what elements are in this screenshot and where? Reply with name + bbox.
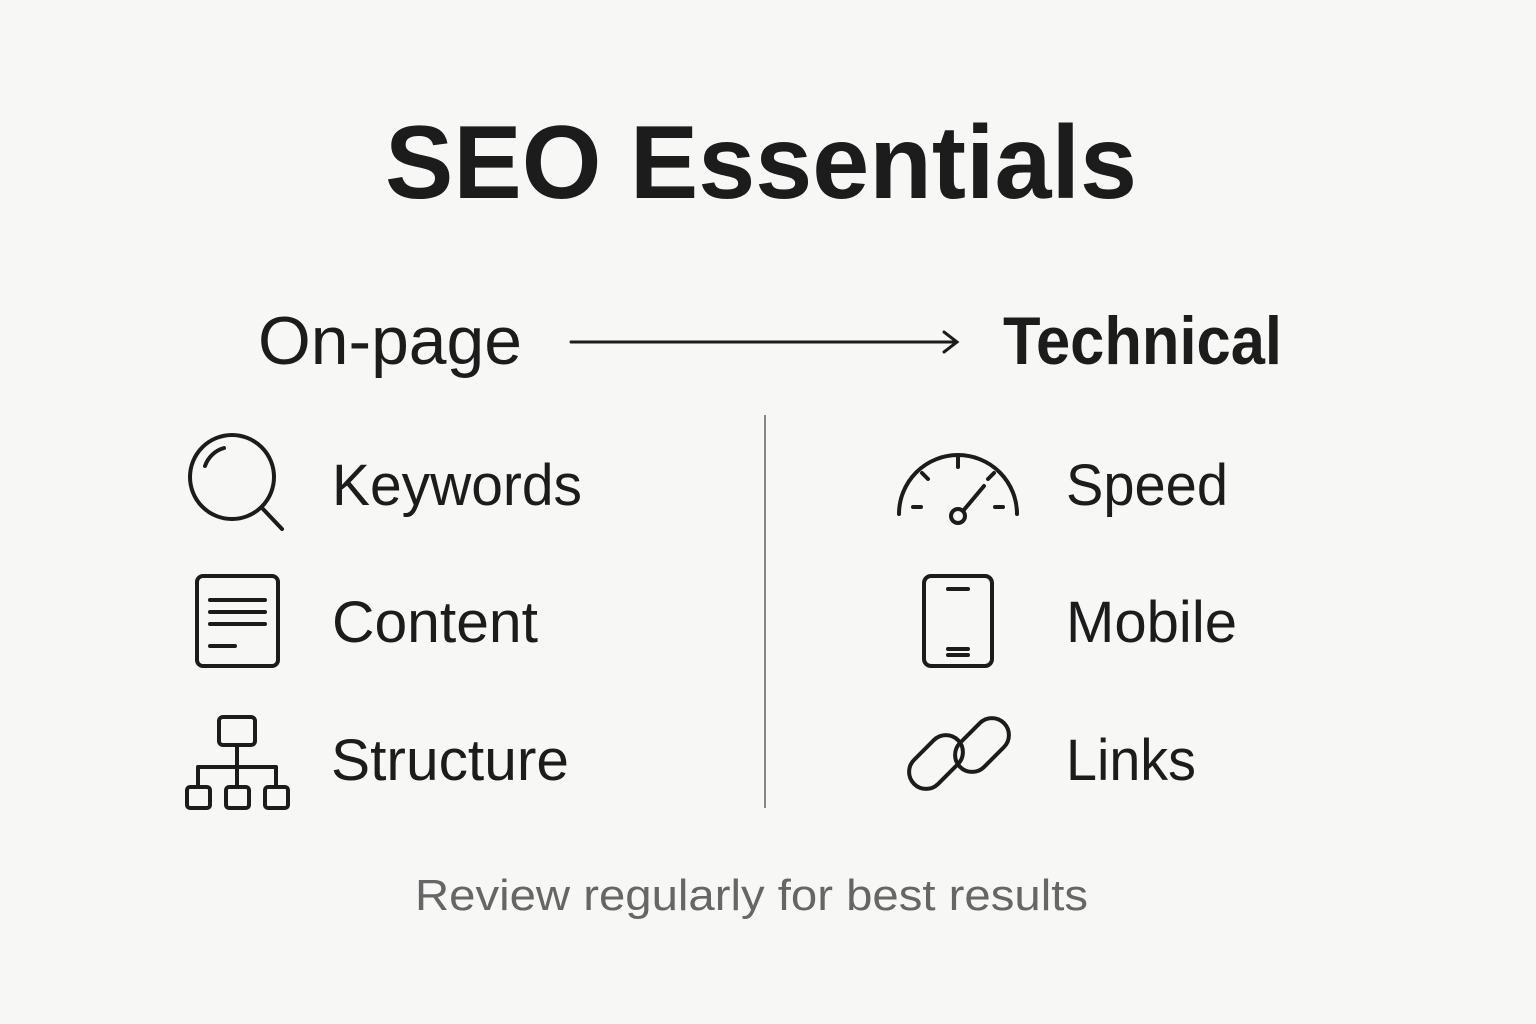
icon: sitemap <box>187 717 288 808</box>
arrow <box>571 332 957 352</box>
title: SEO Essentials <box>385 105 1137 221</box>
item: Content: Content <box>332 590 538 655</box>
item: Links: Links <box>1066 728 1196 793</box>
icon: document <box>197 576 278 666</box>
panel: technical items <box>899 453 1237 796</box>
icon: phone <box>924 576 992 666</box>
heading: On-page: On-page <box>258 303 522 379</box>
item: Mobile: Mobile <box>1066 590 1237 655</box>
icon: speedometer <box>899 455 1017 523</box>
panel: on-page items <box>187 435 582 808</box>
icon: magnifier <box>190 435 282 529</box>
item: Speed: Speed <box>1066 453 1228 518</box>
item: Keywords: Keywords <box>332 453 582 518</box>
footer note: Review regularly for best results <box>415 871 1088 920</box>
icon: link <box>902 711 1016 796</box>
heading: Technical: Technical <box>1003 303 1282 379</box>
item: Structure: Structure <box>331 728 569 793</box>
